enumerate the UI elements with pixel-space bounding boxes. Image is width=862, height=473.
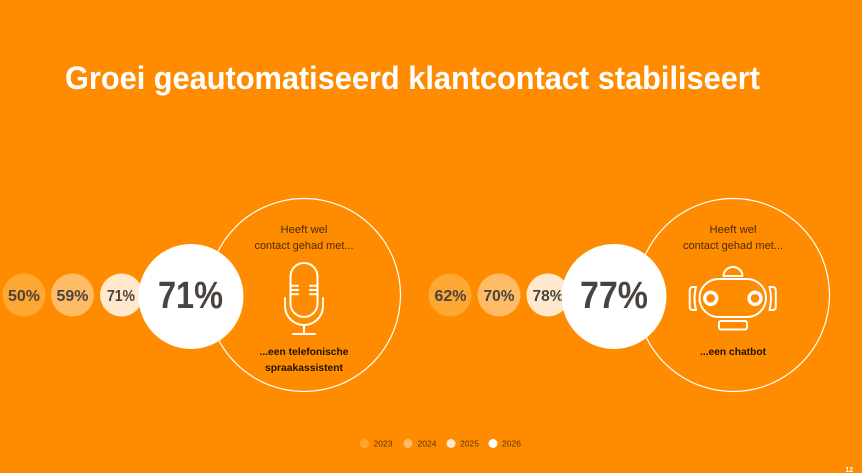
icon: robot (690, 267, 776, 330)
2023 value right (428, 274, 472, 316)
legend 2023: 2023 (374, 440, 393, 448)
intro text right: contact gehad met... (683, 240, 783, 252)
2025 value left (100, 274, 143, 316)
panel: chatbot (428, 198, 830, 392)
intro text left: Heeft wel (280, 224, 328, 236)
intro text right (683, 224, 783, 252)
2026 value left (138, 244, 244, 349)
2023 value right: 62% (434, 288, 466, 305)
2024 value left (51, 274, 94, 316)
outline circle left (208, 198, 400, 392)
2024 value left: 59% (56, 288, 88, 305)
intro text left (254, 224, 354, 252)
label: chatbot: ...een chatbot (700, 346, 766, 358)
2025 value left: 71% (107, 288, 135, 305)
label: telefonische spraakassistent: ...een telefonische (260, 346, 349, 358)
2023 value left: 50% (8, 288, 40, 305)
legend (360, 439, 522, 448)
2026 value left: 71% (158, 275, 223, 317)
legend 2023 (360, 439, 393, 448)
label: telefonische spraakassistent: spraakassistent (265, 362, 343, 374)
legend 2024: 2024 (418, 440, 437, 448)
2025 value right (526, 274, 570, 316)
2025 value right: 78% (532, 288, 564, 305)
2026 value right: 77% (580, 275, 648, 317)
icon: microphone (285, 263, 323, 334)
panel: telefonische spraakassistent (2, 198, 400, 392)
outline circle right (636, 198, 830, 392)
2024 value right: 70% (484, 288, 514, 305)
legend 2026 (488, 439, 522, 448)
2024 value right (478, 274, 520, 316)
label: telefonische spraakassistent (260, 346, 349, 374)
legend 2025: 2025 (460, 440, 480, 448)
intro text right: Heeft wel (710, 224, 756, 236)
2026 value right (562, 244, 666, 349)
title: Groei geautomatiseerd klantcontact stabiliseert (65, 60, 760, 96)
intro text left: contact gehad met... (254, 240, 354, 252)
legend 2025 (446, 439, 480, 448)
2023 value left (2, 274, 46, 316)
legend 2026: 2026 (502, 440, 522, 448)
legend 2024 (404, 439, 437, 448)
